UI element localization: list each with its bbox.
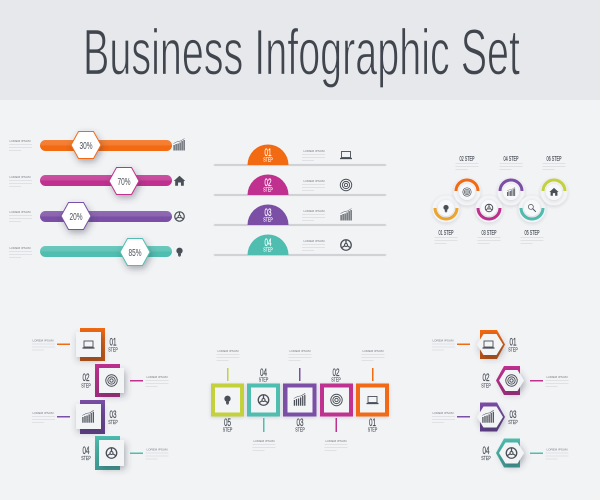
progress row 85%: LOREM IPSUM [9, 246, 31, 250]
square step 04: STEP [259, 378, 268, 384]
panel: vertical square steps [32, 328, 168, 470]
square step 01: LOREM IPSUM [32, 338, 54, 342]
semicircle step 04: 04 [264, 237, 272, 249]
arc step 03: 03 STEP [482, 228, 496, 237]
square step 03: LOREM IPSUM [289, 349, 311, 353]
square step 03: LOREM IPSUM [32, 411, 54, 415]
square step 01: LOREM IPSUM [362, 349, 384, 353]
semicircle step 03: LOREM IPSUM [303, 209, 325, 213]
square step 02: 02 [82, 372, 90, 384]
hexagon step 01: LOREM IPSUM [432, 338, 454, 342]
hexagon step 03: STEP [508, 420, 518, 426]
square step 01 [356, 349, 389, 434]
semicircle step 03 [214, 204, 386, 226]
square step 04: LOREM IPSUM [146, 448, 168, 452]
progress row 20%: 20% [70, 212, 83, 223]
square step 03: 03 [296, 417, 304, 429]
semicircle step 02 [214, 174, 386, 196]
square step 03 [283, 349, 316, 434]
semicircle step 01: 01 [264, 147, 272, 159]
square step 05 [211, 349, 244, 434]
square step 04: STEP [81, 456, 91, 462]
arc step 04: 04 STEP [504, 154, 518, 163]
arc step 02: 02 STEP [460, 154, 474, 163]
square step 01: STEP [368, 428, 377, 434]
progress row 70%: 70% [118, 177, 131, 188]
semicircle step 01: STEP [263, 158, 273, 164]
square step 01 [32, 328, 118, 361]
square step 04: 04 [82, 445, 90, 457]
square step 02: LOREM IPSUM [146, 375, 168, 379]
progress row 30% [9, 132, 185, 158]
hexagon step 02: LOREM IPSUM [546, 375, 568, 379]
progress row 70% [9, 168, 185, 194]
arc step 05: 05 STEP [524, 228, 540, 237]
hexagon step 03: 03 [510, 409, 516, 421]
hexagon step 03: LOREM IPSUM [432, 411, 454, 415]
square step 02: STEP [331, 378, 341, 384]
square step 05: 05 [224, 417, 231, 429]
hexagon step 04: LOREM IPSUM [546, 448, 568, 452]
square step 04 [81, 436, 168, 470]
square step 03 [32, 400, 118, 434]
progress row 85% [9, 238, 183, 266]
arc step 01: 01 STEP [438, 228, 454, 237]
semicircle step 02: LOREM IPSUM [303, 179, 325, 183]
panel: horizontal square steps [211, 349, 389, 450]
hexagon step 04 [481, 438, 568, 468]
hexagon step 01: 01 [510, 336, 516, 348]
square step 03: STEP [108, 420, 118, 426]
progress row 20%: LOREM IPSUM [9, 210, 31, 214]
panel: circular arc steps [432, 154, 568, 244]
progress row 30%: 30% [80, 141, 93, 152]
square step 05: STEP [223, 428, 232, 434]
hexagon step 02: 02 [482, 372, 490, 384]
semicircle step 04: LOREM IPSUM [303, 239, 325, 243]
square step 02 [320, 367, 353, 450]
square step 05: LOREM IPSUM [217, 349, 239, 353]
hexagon step 03 [432, 402, 518, 432]
square step 01: STEP [108, 348, 118, 354]
hexagon step 02: STEP [481, 384, 491, 390]
semicircle step 02: STEP [263, 188, 273, 194]
semicircle step 04: STEP [263, 248, 273, 254]
square step 04: LOREM IPSUM [253, 439, 275, 443]
progress row 30%: LOREM IPSUM [9, 139, 31, 143]
hexagon step 04: 04 [482, 445, 490, 457]
semicircle step 01 [214, 144, 386, 166]
hexagon step 04: STEP [481, 456, 491, 462]
header band [0, 0, 600, 100]
square step 02: 02 [332, 367, 340, 379]
square step 01: 01 [110, 336, 116, 348]
square step 04: 04 [260, 367, 267, 379]
square step 02 [81, 364, 168, 397]
panel: vertical hexagon steps [432, 330, 568, 468]
square step 01: 01 [369, 417, 376, 429]
panel: semicircle steps [214, 144, 386, 256]
panel: progress bars [9, 132, 185, 266]
square step 04 [247, 367, 280, 450]
hexagon step 02 [481, 366, 568, 395]
semicircle step 03: 03 [264, 207, 272, 219]
semicircle step 04 [214, 234, 386, 256]
square step 03: STEP [295, 428, 305, 434]
progress row 70%: LOREM IPSUM [9, 175, 31, 179]
hexagon step 01 [432, 330, 518, 359]
arc step 06: 06 STEP [546, 154, 562, 163]
square step 03: 03 [110, 409, 116, 421]
progress row 20% [9, 202, 184, 230]
hexagon step 01: STEP [508, 348, 518, 354]
semicircle step 03: STEP [263, 218, 273, 224]
semicircle step 02: 02 [264, 177, 272, 189]
progress row 85%: 85% [128, 248, 142, 259]
semicircle step 01: LOREM IPSUM [303, 149, 325, 153]
square step 02: LOREM IPSUM [325, 439, 347, 443]
square step 02: STEP [81, 384, 91, 390]
